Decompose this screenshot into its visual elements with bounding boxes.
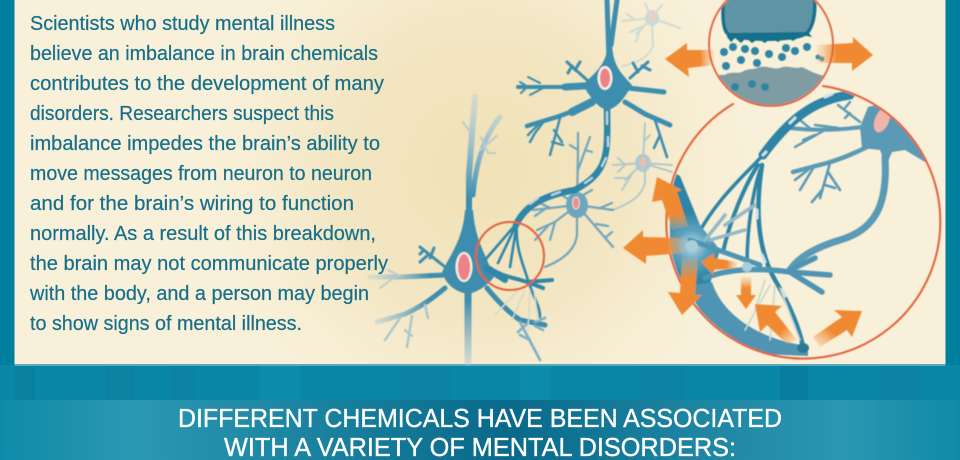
neuron illustration	[370, 0, 945, 362]
heading: DIFFERENT CHEMICALS HAVE BEEN ASSOCIATED	[178, 403, 782, 433]
cream panel	[14, 0, 946, 366]
arrow: lower up left	[755, 304, 797, 344]
central neuron	[516, 0, 670, 225]
body text block: contributes to the development of many	[30, 73, 384, 95]
body text block: the brain may not communicate properly	[30, 253, 388, 275]
left neuron	[370, 97, 545, 362]
big circle axon branches	[695, 94, 850, 347]
arrow: small left	[701, 253, 737, 275]
arrow: lower up right	[813, 310, 862, 347]
body text block: and for the brain’s wiring to function	[30, 193, 354, 215]
faded neuron middle right	[612, 123, 672, 210]
arrow: synapse left	[665, 43, 714, 77]
body text block: disorders. Researchers suspect this	[30, 103, 334, 125]
small circle outline	[709, 0, 833, 106]
small neuron centre	[533, 133, 613, 267]
arrow: synapse right	[817, 37, 873, 71]
big circle neuron cell	[790, 100, 945, 270]
synapse terminal, receptor and dots	[718, 0, 825, 106]
body text block: move messages from neuron to neuron	[30, 163, 372, 185]
arrow: left	[623, 230, 684, 264]
arrow: down left	[668, 258, 702, 315]
body text block	[29, 13, 388, 335]
heading band background	[0, 400, 960, 460]
big circle outline	[666, 86, 940, 359]
lower striped band	[0, 365, 960, 400]
body text block: to show signs of mental illness.	[30, 313, 302, 335]
body text block: believe an imbalance in brain chemicals	[30, 43, 378, 65]
heading	[178, 403, 782, 460]
arrow: small down	[736, 277, 756, 309]
body text block: normally. As a result of this breakdown,	[30, 223, 376, 245]
faded neuron top right	[622, 3, 680, 66]
body text block: Scientists who study mental illness	[30, 13, 335, 35]
body text block: imbalance impedes the brain’s ability to	[30, 133, 380, 155]
arrow: up left	[652, 177, 688, 230]
left circle outline	[476, 222, 544, 290]
axon terminal inside left circle	[485, 223, 552, 330]
body text block: with the body, and a person may begin	[29, 283, 369, 305]
big circle lower dendrite	[670, 170, 830, 356]
